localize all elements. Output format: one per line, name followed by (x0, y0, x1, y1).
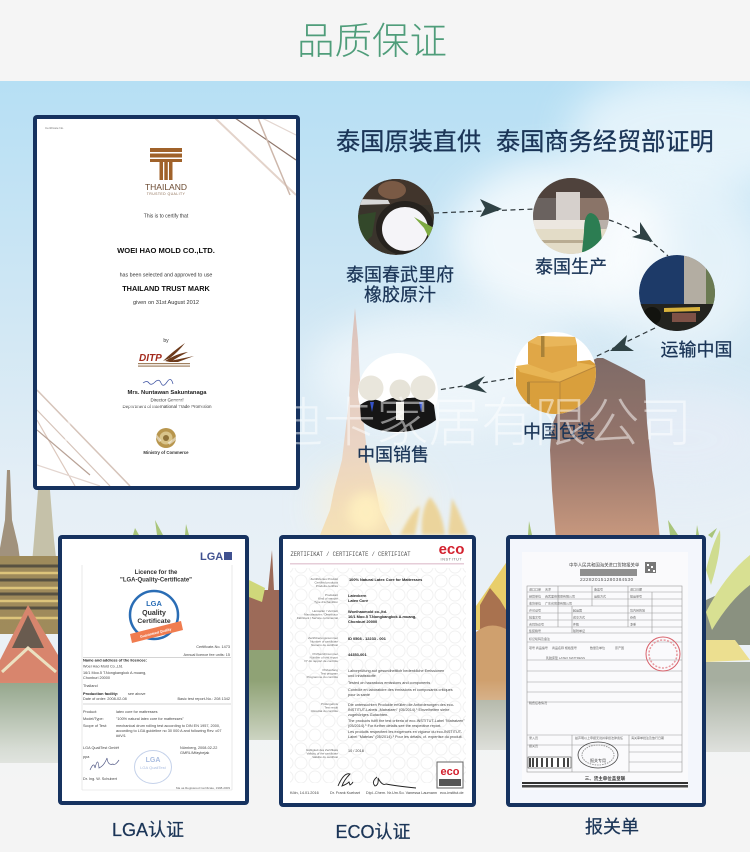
logo tagline: TRUSTED QUALITY (147, 192, 185, 196)
signatures (338, 774, 416, 788)
form entries: 数量及单位 (590, 645, 605, 650)
form entries: 标记唛码及备注 (529, 636, 550, 641)
barcode (580, 569, 637, 576)
form entries: 春武里府贸易有限公司 (545, 594, 575, 598)
Thailand T logo (150, 148, 182, 180)
ministry seal (156, 428, 176, 448)
label: packaging: 中国包装 (523, 422, 595, 442)
certificate rows: Prüfberichtnummer (312, 652, 338, 656)
form entries: 原产国 (615, 645, 624, 650)
icon: cardboard boxes (514, 332, 598, 420)
form entries: 商品名称 规格型号 (552, 645, 577, 650)
licence details: Name and address of the licencee: (83, 658, 147, 662)
oval stamp (578, 742, 618, 768)
licence details: Chonburi 20000 (83, 676, 110, 680)
grass tips (133, 520, 717, 538)
caption: ECO: ECO认证 (335, 822, 411, 842)
licence details: see above (128, 692, 146, 696)
certificate rows: Gültigkeit des Zertifikats (306, 748, 338, 752)
certificate rows: Fabricant / Service commercial (297, 616, 338, 620)
LGA logo: LGA (200, 551, 223, 563)
certificate rows: Latex Core (348, 598, 369, 603)
panel: Thailand Trust Mark certificate (33, 115, 300, 490)
signatory: Department of International Trade Promotion (122, 404, 212, 409)
licence details: 16/1 Moo.5 T.Nongkangkok A.muang, (83, 671, 146, 675)
licence details: Dr. Ing. W. Schubert (83, 777, 118, 781)
certificate rows: ID 0508 - 12233 - 001 (348, 636, 387, 641)
certificate rows: (05/2014).¹ For further details see the respective report. (348, 724, 441, 728)
licence details: Basic test report-No.: 208 1342 (177, 697, 230, 701)
certificate text: This is to certify that (144, 214, 189, 220)
label: shipping: 运输中国 (660, 340, 732, 360)
certificate rows: Validity of the certificate (307, 752, 338, 756)
form footer: 三、货主单位盖章联 (585, 775, 626, 782)
form entries: 广东省贸易有限公司 (545, 600, 572, 606)
form entries: 收货单位 (529, 600, 541, 606)
ministry label: Ministry of Commerce (143, 450, 189, 455)
certificate rows: Dipl.-Chem. Nr.Um.So. Vanessa Laumann (366, 791, 437, 795)
quality badge: LGA (146, 599, 162, 608)
icon: factory photo (533, 178, 610, 255)
licence details: Model/Type: (83, 717, 104, 721)
certificate rows: 16/1 Moo.5 T.Nongkangkok A.muang, (348, 614, 416, 619)
certificate rows: 100% Natural Latex Core for Mattresses (349, 577, 422, 582)
form entries: 进口口岸 (529, 586, 541, 592)
LGA stamp: LGA QualiTest (140, 765, 167, 770)
licence details: ##V/1 (116, 734, 126, 738)
quality badge (130, 591, 183, 643)
form entries: 提运单号 (630, 594, 642, 598)
flow arrows (434, 199, 668, 393)
small reference text: Certificate No. (45, 126, 64, 130)
form entries: 兹声明以上申报无讹并承担法律责任 (575, 735, 623, 740)
form title: 中华人民共和国海关进口货物报关单 (569, 562, 640, 568)
quality badge: Certificate (137, 618, 171, 625)
certificate rows: Type d'échantillon (314, 600, 338, 604)
certificate rows (290, 577, 465, 795)
DITP logo (138, 343, 194, 367)
certificate rows: und Inhaltsstoffe (348, 674, 376, 678)
label: sales: 中国销售 (357, 445, 429, 465)
certificate rows: Produkart (325, 593, 338, 597)
certificate rows: 44353-001 (348, 652, 367, 657)
signatory (122, 390, 212, 409)
licence details: Product: (83, 710, 97, 714)
eco logo: INSTITUT (441, 558, 463, 562)
form entries: 成交方式 (573, 614, 585, 620)
scanned barcode block (528, 757, 571, 768)
LGA stamp (134, 750, 172, 784)
licence details: Date of order: 2008-02-08 (83, 697, 127, 701)
eco logo: eco (439, 541, 464, 558)
licence details: Nürnberg, 2008-02-22 (180, 746, 217, 750)
quality badge: Guaranteed Quality (140, 627, 172, 639)
licence details: Annual licence fee units: 15 (184, 653, 230, 657)
label: rubber source: 橡胶原汁 (364, 285, 436, 305)
form grid (527, 586, 682, 772)
DITP logo: DITP (139, 353, 162, 364)
certificate rows: Chonburi 20000 (348, 619, 377, 624)
icon: rubber latex photo (358, 179, 434, 255)
certificate text: has been selected and approved to use (120, 272, 212, 278)
certificate rows: Contrôle en laboratoire des émissions et composants critiques (348, 688, 453, 692)
licence heading (120, 570, 192, 584)
form entries: 起运国 (573, 608, 582, 612)
label: rubber source (346, 265, 454, 305)
licence details: Production facility: (83, 691, 118, 696)
form entries: 天津 (545, 586, 551, 592)
certificate rows: Test result (324, 706, 338, 710)
certificate rows: Number of certificate (310, 640, 338, 644)
licence details: GMRL/Mfaybejak (180, 751, 209, 755)
certificate rows: pour la santé (348, 693, 370, 697)
form entries: 许可证号 (529, 608, 541, 612)
certificate rows: Number of test report (310, 656, 338, 660)
right palms (706, 530, 750, 752)
certificate rows: Produits certifiés (316, 584, 338, 588)
certificate rows: INSTITUT-Labels „Matratzen" (05/2014).¹ Einzelheiten siehe (348, 708, 449, 712)
licence heading: "LGA-Quality-Certificate" (120, 578, 192, 584)
form entries (529, 586, 664, 748)
heading: origin: 泰国原装直供 (336, 129, 481, 156)
certificate rows: Zertifiziertes Produkt (310, 577, 338, 581)
licence details: according to LGA guideline no 30 000 A and following Rev. c07 (116, 729, 221, 733)
arrow: shipping to packaging (595, 328, 655, 357)
licence details: latex core for mattresses (116, 710, 158, 714)
watermark: 广东爱梦迪卡家居有限公司 (60, 394, 692, 453)
certificate rows: Validité du certificat (312, 755, 338, 759)
form entries: 运输方式 (594, 594, 606, 598)
heading: certification: 泰国商务经贸部证明 (496, 129, 714, 156)
gap: left between certificates (249, 550, 282, 740)
wheat (400, 497, 468, 535)
form entries: 随附单证 (573, 628, 585, 633)
form entries: 件数 (573, 622, 579, 626)
certificate rows: Les produits respectent les exigences en vigueur du eco-INSTITUT- (348, 730, 463, 734)
form entries: 录入员 (529, 735, 538, 740)
licence details: Ma ua Registered Certificate, 1998-2009 (176, 786, 230, 790)
label: Thai production: 泰国生产 (535, 257, 607, 277)
form entries: 批准文号 (529, 614, 541, 620)
label: rubber source: 泰国春武里府 (346, 265, 454, 285)
certificate rows: Label "Matelas" (05/2014).¹ Pour les détails, cf. expertise du produit. (348, 735, 463, 739)
certificate rows: Zertifizierungsnummer (308, 636, 338, 640)
certificate rows: Manufacturer / Distributor (304, 612, 338, 616)
licence details: Woei Hao Mold Co.,Ltd. (83, 664, 123, 668)
form entries: 经营单位 (529, 594, 541, 598)
decorative corner ribbons (37, 118, 296, 486)
certificate rows: Köln, 14.01.2016 (290, 791, 319, 795)
form entries: 进口日期 (630, 586, 642, 592)
licence details: Thailand (83, 684, 98, 688)
certificate rows: Numéro de certificat (311, 643, 338, 647)
certificate rows: Test program (320, 672, 338, 676)
form entries: 境内目的地 (630, 608, 645, 612)
form entries: 净重 (630, 622, 636, 626)
stone ruin (550, 358, 660, 540)
licence heading: Licence for the (135, 570, 178, 576)
icon: shipping truck photo (639, 255, 716, 332)
quality badge: Quality (142, 610, 166, 617)
certificate rows: zugehöriges Gutachten. (348, 713, 388, 717)
LGA signature (90, 758, 119, 770)
certificate rows: Die untersuchten Produkte erfüllen die Anforderungen des eco- (348, 703, 455, 707)
form entries: 税费征收情况 (529, 700, 547, 705)
certificate text: WOEI HAO MOLD CO.,LTD. (117, 246, 215, 255)
caption: customs declaration: 报关单 (585, 817, 639, 837)
title: 品质保证 (297, 20, 447, 62)
form entries: 乳胶床垫 LATEX MATTRESS (546, 655, 585, 660)
certificate rows: Latexkern (348, 593, 367, 598)
certificate rows: Programme du contrôle (307, 675, 338, 679)
licence details: Scope of Test: (83, 724, 107, 728)
panel: customs declaration (506, 535, 706, 807)
licence details (83, 645, 231, 790)
certificate text: THAILAND TRUST MARK (122, 284, 211, 293)
logo wordmark: THAILAND (145, 182, 187, 192)
certificate heading: ZERTIFIKAT / CERTIFICATE / CERTIFICAT (290, 551, 411, 558)
licence details: mechanical drum rolling test according to DIN EN 1957, 2000, (116, 724, 220, 728)
certificate rows: Résultat du contrôle (311, 709, 338, 713)
certificate text: by (163, 338, 169, 344)
gap: right between certificates (476, 560, 508, 750)
certificate rows: eco-institut.de (440, 791, 464, 795)
certificate rows: Dr. Frank Kuebart (330, 791, 361, 795)
certificate rows: Prüfergebnis (321, 702, 338, 706)
licence details: "100% natural latex core for mattresses" (116, 717, 184, 721)
LGA stamp: LGA (146, 757, 160, 764)
certificate text (117, 214, 215, 344)
arrow: packaging to sales (438, 376, 513, 393)
signatory: Director General (150, 398, 184, 402)
certificate rows: Woeihaomold co.,ltd. (348, 609, 387, 614)
form entries: 海关审单批注及放行日期 (631, 735, 664, 740)
certificate rows: Laborprüfung auf gesundheitlich bedenkliche Emissionen (348, 669, 444, 673)
pagoda spire (320, 308, 392, 535)
eco seal (437, 762, 463, 788)
certificate rows: The products fulfil the test criteria of eco-INSTITUT-Label "Matratzen" (348, 719, 465, 723)
form entries: 杂费 (630, 614, 636, 620)
form entries: 备案号 (594, 586, 603, 592)
arrow: latex to production (434, 199, 535, 217)
certificate rows: 10 / 2018 (348, 749, 364, 753)
form number: 222820151280384530 (580, 577, 633, 583)
certificate rows: Prüfumfang (322, 668, 338, 672)
form entries: 集装箱号 (529, 628, 541, 633)
form entries: 合同协议号 (529, 622, 544, 626)
licence details: ppa (83, 755, 90, 759)
certificate rows: Kind of sample (318, 596, 338, 600)
certificate rows: N° du rapport de contrôle (304, 659, 338, 663)
left temple (0, 470, 60, 763)
panel: LGA certificate (58, 535, 249, 805)
signatory: Mrs. Nuntawan Sakuntanaga (128, 390, 207, 396)
form entries: 报关员 (529, 743, 538, 748)
caption: LGA: LGA认证 (112, 820, 184, 840)
signature (143, 379, 173, 385)
certificate rows: Tested on hazardous emissions and components (348, 681, 430, 685)
arrow: production to shipping (609, 220, 668, 256)
oval stamp: 报关专用 (590, 757, 606, 763)
red customs stamp (646, 637, 680, 671)
header band (0, 0, 750, 81)
form entries: 项号 商品编号 (529, 645, 548, 650)
panel: ECO certificate (279, 535, 476, 807)
licence details: LGA QualiTest GmbH (83, 746, 120, 750)
icon: three business figures (358, 353, 438, 433)
certificate text: given on 31st August 2012 (133, 300, 199, 306)
certificate rows: Certified products (314, 580, 338, 584)
certificate rows: Hersteller / Vertrieb (312, 609, 338, 613)
licence details: Certificate-No. 1473 (196, 645, 230, 649)
QR code (645, 562, 656, 573)
eco seal: eco (441, 766, 460, 778)
